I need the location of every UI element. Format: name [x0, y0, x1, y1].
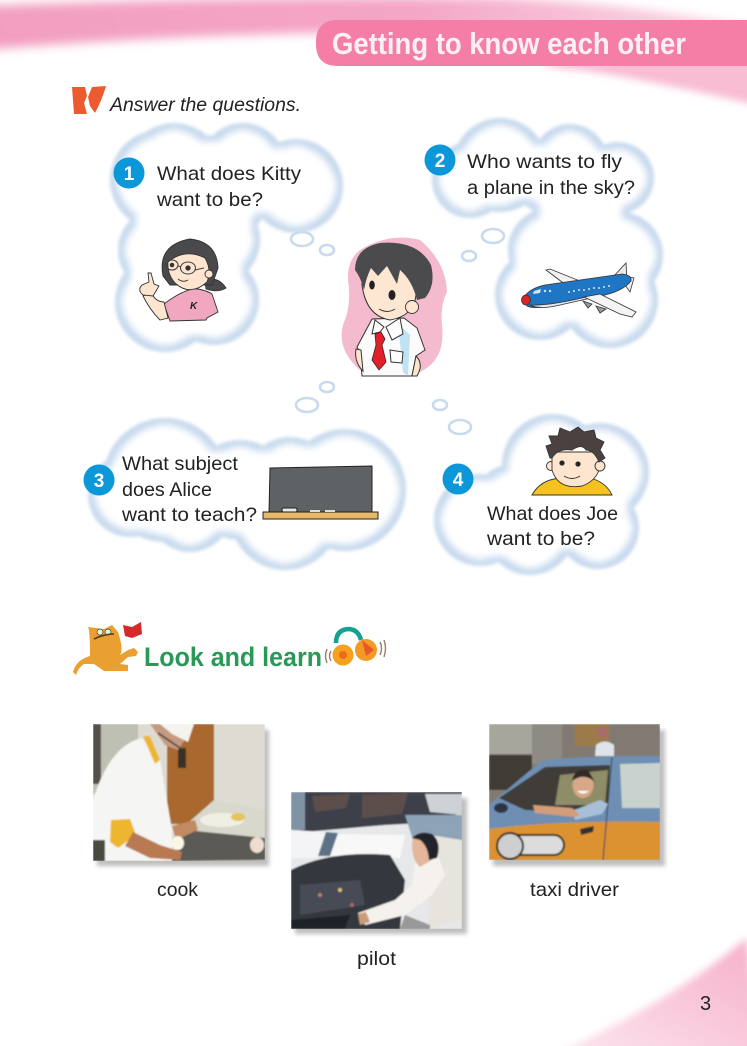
number badge 1 — [114, 158, 144, 188]
number badge 4 — [442, 464, 474, 494]
caption: cook: cook — [157, 879, 198, 901]
question 2 text: a plane in the sky? — [467, 177, 635, 199]
shirt — [357, 318, 425, 376]
question 2 text — [467, 151, 635, 199]
photo card: pilot — [291, 792, 467, 970]
icon: Joe, boy — [532, 427, 612, 495]
caption: taxi driver: taxi driver — [530, 879, 620, 901]
question 1 text — [156, 163, 301, 211]
instruction text: Answer the questions. — [109, 95, 301, 116]
photo: pilot — [291, 792, 462, 929]
number badge 4: 4 — [453, 470, 464, 491]
icon: question mark — [72, 86, 106, 114]
bottom right corner swoosh — [540, 938, 747, 1046]
panel: question 1 cloud — [110, 123, 343, 352]
photo card: taxi driver — [489, 724, 665, 901]
thought bubbles — [291, 229, 504, 434]
face — [362, 262, 416, 320]
panel: question 2 cloud — [424, 118, 663, 348]
caption: pilot: pilot — [357, 948, 397, 970]
panel: question 3 cloud — [84, 418, 406, 570]
question 4 text: What does Joe — [487, 503, 618, 525]
question 3 text: want to teach? — [121, 504, 257, 526]
question 1 text: What does Kitty — [157, 163, 301, 185]
photo card: cook — [93, 724, 269, 901]
eyes and mouth — [369, 280, 396, 312]
pink halo — [342, 238, 447, 372]
question 4 text: want to be? — [486, 528, 595, 550]
question 3 text — [121, 453, 257, 526]
icon: orange cat with book — [73, 622, 142, 675]
hair — [355, 243, 433, 300]
question 3 text: What subject — [122, 453, 239, 475]
question 2 text: Who wants to fly — [467, 151, 622, 173]
page number: 3 — [700, 993, 711, 1015]
number badge 2: 2 — [435, 151, 445, 172]
question 4 text — [486, 503, 618, 550]
panel: question 4 cloud — [434, 414, 649, 575]
collar and pocket — [372, 318, 403, 363]
number badge 1: 1 — [124, 164, 135, 185]
question 3 text: does Alice — [122, 479, 212, 501]
look and learn heading — [73, 622, 386, 675]
question 1 text: want to be? — [156, 189, 263, 211]
icon: blackboard — [263, 466, 378, 519]
heading text: Look and learn — [144, 642, 322, 672]
number badge 3: 3 — [94, 471, 104, 492]
number badge 3 — [84, 464, 114, 496]
title banner — [316, 20, 747, 66]
instruction — [72, 86, 301, 116]
icon: Kitty, girl with glasses: K — [190, 301, 198, 312]
icon: airplane — [522, 263, 636, 317]
tie — [372, 332, 386, 370]
icon: Kitty, girl with glasses — [140, 239, 226, 321]
header background swoosh — [0, 0, 747, 106]
photo: taxi driver — [489, 724, 660, 860]
central boy character — [342, 238, 447, 376]
icon: headphones — [326, 629, 386, 666]
number badge 2 — [424, 144, 456, 176]
title text: Getting to know each other — [332, 26, 686, 61]
photo: cook — [93, 724, 265, 861]
